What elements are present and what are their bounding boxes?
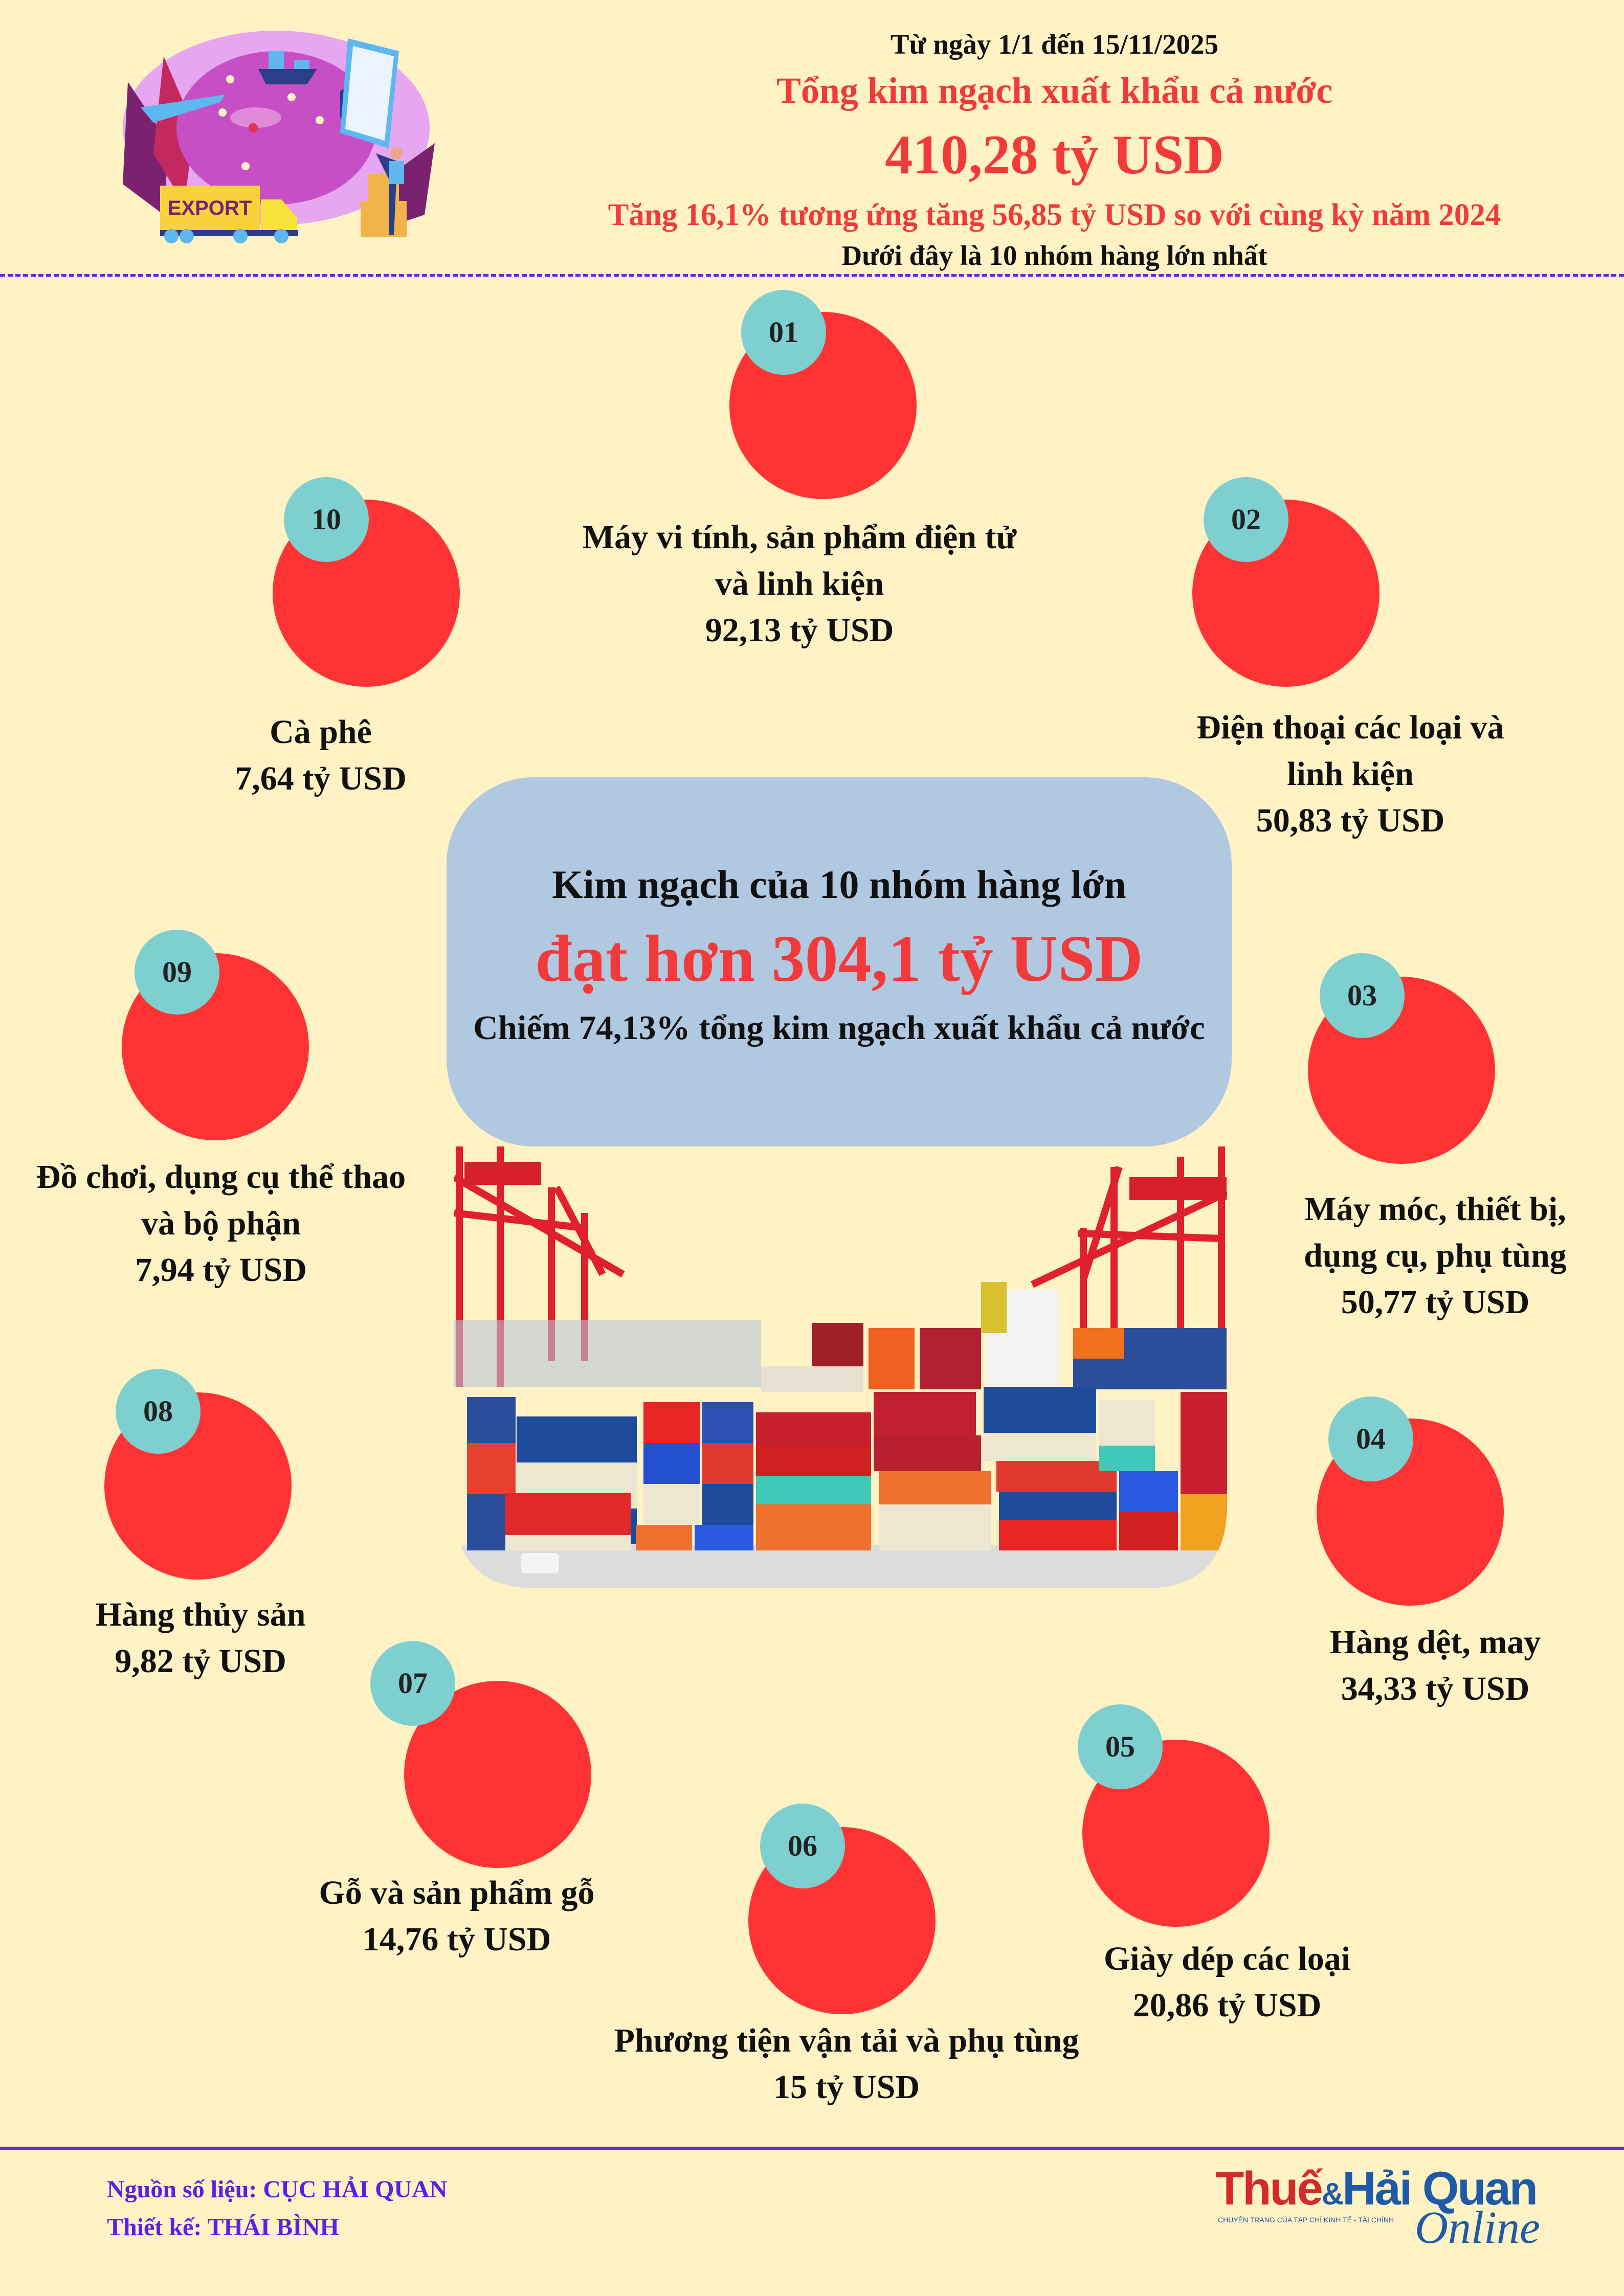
circle 03 [1308,977,1495,1164]
label 03: 50,77 tỷ USD [1341,1284,1529,1321]
circle 08 [104,1392,292,1580]
label 04: Hàng dệt, may [1330,1624,1541,1661]
illustration: export globe: EXPORT [168,197,252,219]
item 05 [1078,1704,1350,2024]
header: title: Tổng kim ngạch xuất khẩu cả nước [776,70,1332,111]
summary share: Chiếm 74,13% tổng kim ngạch xuất khẩu cả nước [473,1009,1205,1047]
label 07: 14,76 tỷ USD [363,1921,551,1958]
label 03: dụng cụ, phụ tùng [1304,1237,1567,1274]
label 05: 20,86 tỷ USD [1133,1987,1321,2024]
label 05 [1104,1940,1350,2024]
item 08 [96,1369,591,1868]
circle 07 [404,1681,591,1868]
center photo: container port [454,1146,1227,1588]
label 07: Gỗ và sản phẩm gỗ [319,1874,595,1911]
badge 10 [284,477,369,562]
badge 03: 03 [1347,979,1377,1012]
footer: logo: Online [1415,2202,1540,2253]
badge 05 [1078,1704,1163,1789]
badge 01: 01 [769,316,798,349]
center box: summary [447,777,1232,1146]
circle 04 [1317,1419,1504,1606]
badge 08 [116,1369,201,1454]
label 02: 50,83 tỷ USD [1256,802,1444,839]
label 06: 15 tỷ USD [773,2068,920,2106]
badge 04: 04 [1356,1422,1386,1455]
badge 07 [370,1641,455,1726]
footer: credits: Thiết kế: THÁI BÌNH [107,2214,339,2241]
item 10 [235,477,460,797]
footer: credits: Nguồn số liệu: CỤC HẢI QUAN [107,2176,447,2203]
label 04: 34,33 tỷ USD [1341,1670,1529,1707]
circle 02 [1192,500,1380,687]
label 01: Máy vi tính, sản phẩm điện tử [583,519,1016,556]
item 06 [614,1804,1079,2106]
label 09 [36,1158,406,1289]
label 09: Đồ chơi, dụng cụ thể thao [36,1158,406,1196]
header: subtitle: Dưới đây là 10 nhóm hàng lớn nhất [841,240,1267,271]
label 10 [235,713,407,797]
label 02: linh kiện [1287,755,1414,793]
circle 10 [273,500,460,687]
label 03: Máy móc, thiết bị, [1304,1190,1566,1228]
label 04 [1330,1624,1541,1707]
label 08 [96,1596,305,1680]
circle 01 [729,312,917,499]
label 09: 7,94 tỷ USD [135,1251,307,1289]
summary heading: Kim ngạch của 10 nhóm hàng lớn [552,862,1126,907]
label 03 [1304,1190,1567,1321]
badge 04 [1328,1397,1413,1481]
badge 09 [135,930,219,1015]
badge 03 [1320,953,1405,1038]
item 02 [1192,477,1504,839]
label 09: và bộ phận [141,1205,301,1242]
badge 08: 08 [143,1394,173,1428]
label 01: và linh kiện [715,565,884,602]
badge 07: 07 [398,1667,428,1700]
item 03 [1304,953,1567,1321]
label 08: Hàng thủy sản [96,1596,305,1633]
item 09 [36,930,406,1289]
badge 06: 06 [788,1829,817,1862]
badge 06 [760,1804,845,1888]
badge 05: 05 [1105,1730,1135,1763]
badge 09: 09 [162,955,192,988]
label 02 [1196,709,1504,839]
label 10: 7,64 tỷ USD [235,760,407,797]
summary value: đạt hơn 304,1 tỷ USD [535,922,1143,996]
footer: logo [1215,2163,1540,2253]
badge 02: 02 [1231,503,1261,536]
item 04 [1317,1397,1541,1707]
label 08: 9,82 tỷ USD [115,1642,286,1680]
header: growth: Tăng 16,1% tương ứng tăng 56,85 tỷ USD so với cùng kỳ năm 2024 [608,198,1501,232]
circle 06 [748,1827,936,2014]
footer: logo: Thuế&Hải Quan [1215,2163,1537,2215]
label 02: Điện thoại các loại và [1196,709,1504,746]
label 07 [319,1874,595,1958]
badge 02 [1204,477,1288,562]
circle 05 [1082,1740,1270,1927]
header: total value: 410,28 tỷ USD [885,124,1224,186]
footer: credits [107,2176,447,2241]
footer: logo: CHUYÊN TRANG CỦA TẠP CHÍ KINH TẾ - TÀI CHÍNH [1218,2216,1394,2224]
label 05: Giày dép các loại [1104,1940,1350,1977]
label 01 [583,519,1017,649]
item 01 [583,290,1017,649]
label 01: 92,13 tỷ USD [705,612,894,649]
label 06 [614,2022,1079,2106]
illustration: export globe [123,31,435,243]
label 06: Phương tiện vận tải và phụ tùng [614,2022,1079,2059]
label 10: Cà phê [270,713,372,751]
header: date: Từ ngày 1/1 đến 15/11/2025 [891,29,1218,60]
badge 01 [741,290,826,375]
badge 10: 10 [312,503,341,536]
circle 09 [122,953,309,1140]
item 07 [319,1641,595,1958]
